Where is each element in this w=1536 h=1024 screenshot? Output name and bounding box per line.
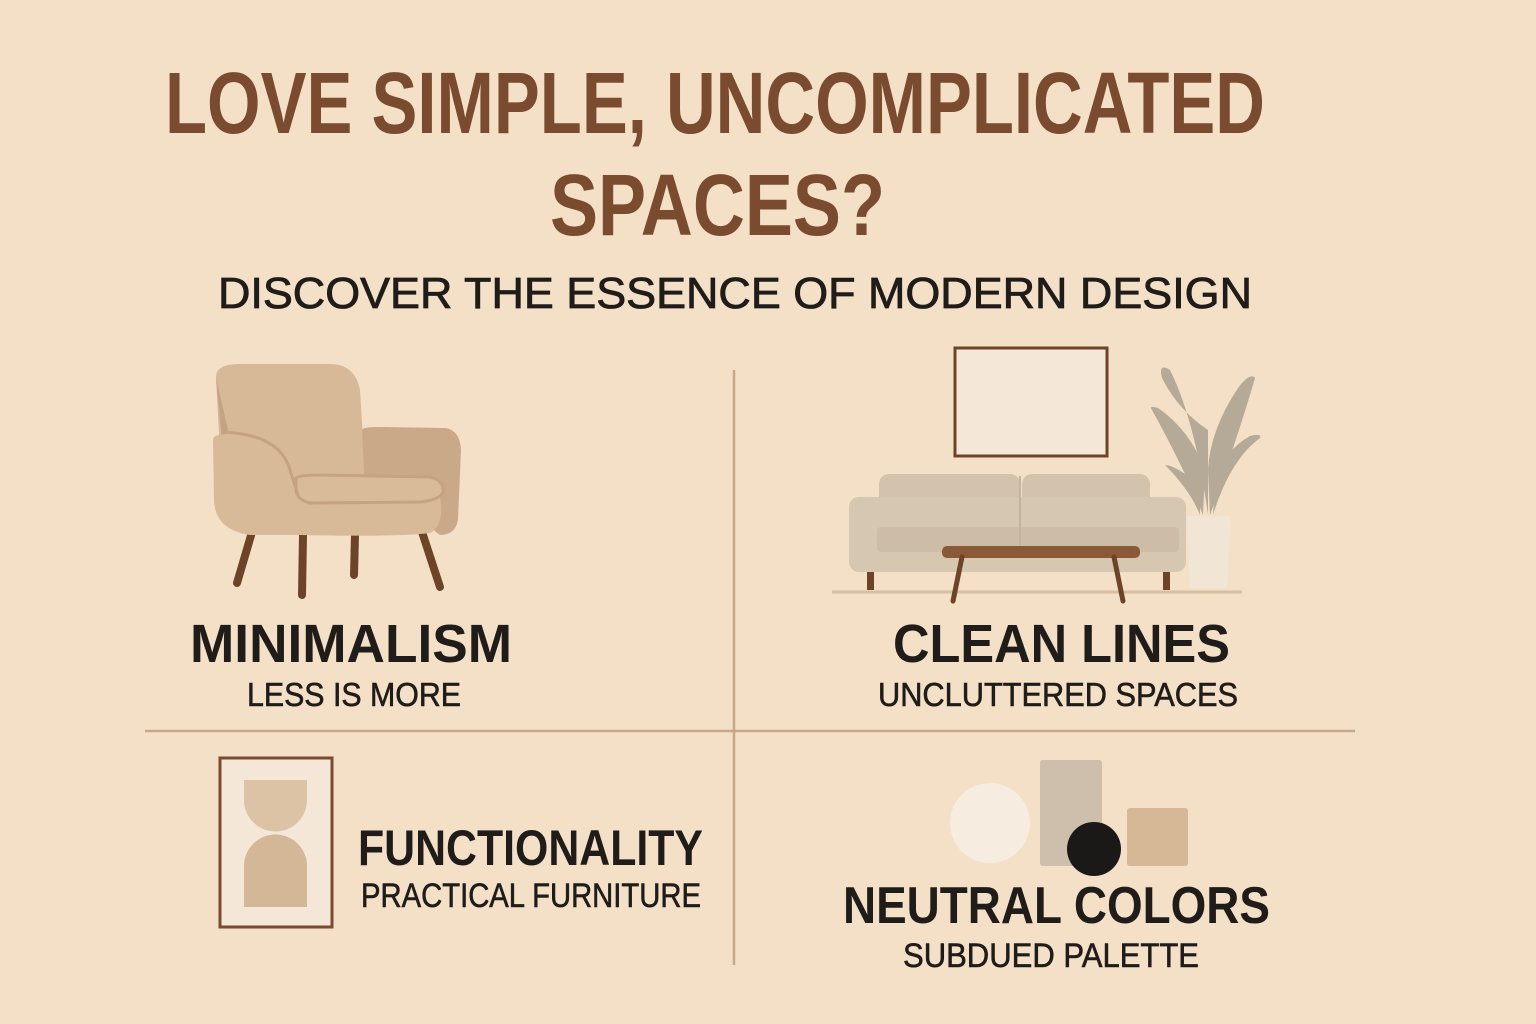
heading: neutral colors: NEUTRAL COLORS — [843, 877, 1270, 935]
icon: living room — [832, 348, 1260, 601]
subheading: PRACTICAL FURNITURE — [361, 877, 701, 915]
panel: neutral colors — [843, 760, 1270, 975]
icon: color swatches — [950, 760, 1188, 876]
icon: armchair — [213, 364, 461, 595]
icon: framed art — [220, 758, 332, 927]
subheading: UNCLUTTERED SPACES — [878, 676, 1238, 713]
subheading: LESS IS MORE — [247, 676, 461, 713]
title: SPACES? — [550, 157, 885, 254]
heading: functionality: FUNCTIONALITY — [358, 820, 703, 876]
panel: functionality — [220, 758, 703, 927]
panel: minimalism — [190, 364, 512, 713]
subheading: SUBDUED PALETTE — [903, 937, 1199, 975]
title — [165, 55, 1265, 254]
panel: clean lines — [832, 348, 1260, 713]
subtitle: DISCOVER THE ESSENCE OF MODERN DESIGN — [218, 269, 1252, 318]
title: LOVE SIMPLE, UNCOMPLICATED — [165, 55, 1265, 152]
heading: clean lines: CLEAN LINES — [893, 614, 1230, 674]
heading: minimalism: MINIMALISM — [190, 614, 512, 674]
